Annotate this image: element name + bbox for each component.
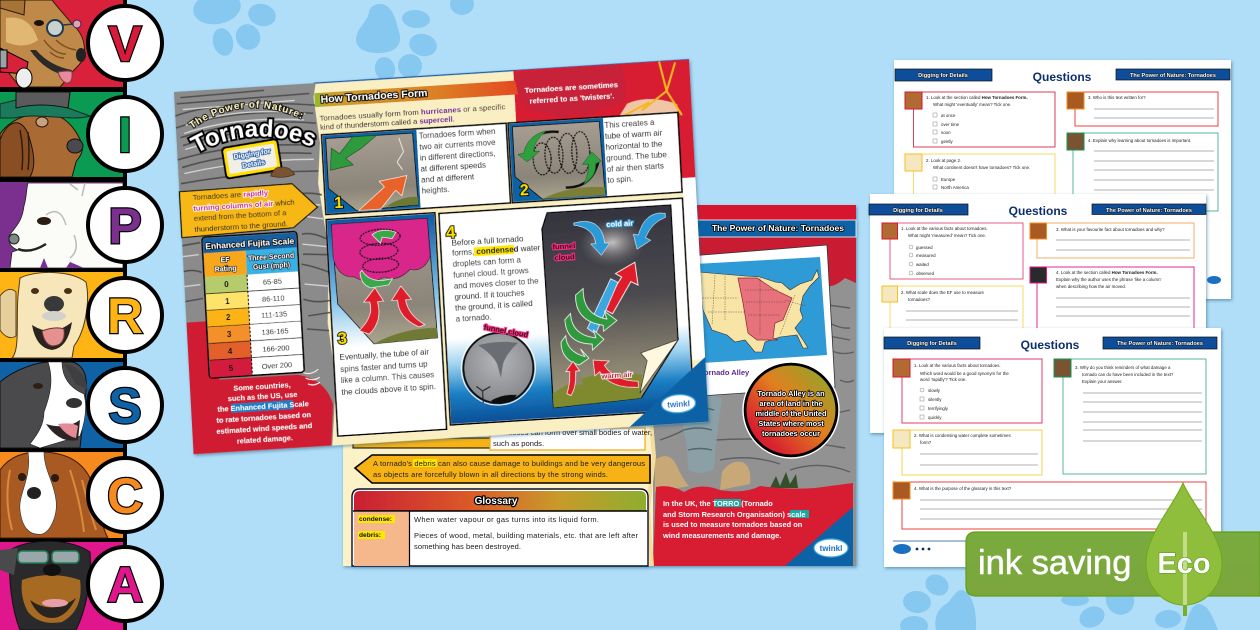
arrow: green current: [329, 135, 378, 170]
callout circle: Tornado Alley: Tornado Alley is an: [757, 389, 825, 398]
panel 2 text: horizontal to the: [605, 139, 663, 152]
question 1: Which word would be a good synonym for the: [920, 371, 1009, 376]
question 4: 4. Explain why learning about tornadoes is important.: [1088, 138, 1191, 143]
question 3: [1030, 223, 1194, 258]
air tube coils: [532, 131, 591, 176]
photo: funnel cloud inset: [459, 320, 537, 407]
heading bar: How Tornadoes Form: How Tornadoes Form: [320, 88, 428, 106]
map of the USA: [698, 270, 819, 352]
panel 3: column of air: [326, 213, 447, 436]
question 1: slowly: [928, 388, 941, 393]
photo: tornado with airflow arrows: cloud: [554, 252, 575, 262]
red footer panel: TORRO scale: wind measurements and damage.: [662, 531, 781, 540]
fact box: such as ponds: Tornadoes can form over small bodies of water,: [493, 428, 652, 437]
title: The Power of Nature: Tornadoes: [186, 99, 318, 154]
table rows: 136-165: [261, 326, 289, 337]
table rows: [205, 271, 303, 378]
yellow arrow: definition: Tornadoes are rapidly: [192, 188, 269, 202]
arrow: green right: [582, 151, 603, 184]
callout circle: Tornado Alley: middle of the United: [755, 409, 827, 418]
intro text: [319, 102, 506, 132]
question 1: terrifyingly: [928, 406, 949, 411]
number 1: 1: [334, 195, 344, 212]
panel 3 text: like a column. This causes: [341, 370, 434, 385]
panel 4 text: funnel cloud. It grows: [453, 266, 529, 280]
question 1: What might 'eventually' mean? Tick one.: [933, 102, 1011, 107]
red callout blob: to rate tornadoes based on: [216, 410, 312, 425]
question 4: [1067, 133, 1218, 211]
heading: Questions: Questions: [1033, 70, 1092, 84]
text: Eco: Eco: [1157, 548, 1211, 580]
arrow: red up left: [357, 287, 385, 335]
icon: border collie: [0, 362, 88, 448]
heading: Questions: Questions: [1009, 204, 1068, 218]
header bar right: The Power of Nature: Tornadoes: [1106, 208, 1192, 214]
question 4: [1030, 267, 1194, 337]
header bar right: [1116, 69, 1230, 80]
question 3: tornado can do have been included in the text?: [1082, 372, 1174, 377]
panel 1: two air currents: [322, 123, 510, 215]
letter badge A: [88, 547, 162, 621]
heading bar: How Tornadoes Form: [314, 80, 520, 107]
question 4: 4. What is the purpose of the glossary in this text?: [914, 486, 1012, 491]
panel 2 text: ground. The tube: [606, 150, 668, 163]
arrow: orange current: [357, 175, 409, 211]
callout circle: Tornado Alley: area of land in the: [759, 399, 823, 408]
question 2: North America: [941, 185, 969, 190]
table rows: 2: [226, 313, 231, 322]
panel 4 text: forms, condensed water: [452, 243, 541, 258]
question 1: 1. Look at the various facts about tornadoes.: [914, 363, 1001, 368]
header bar left: [869, 204, 968, 215]
logo: twinkl: twinkl: [820, 544, 842, 553]
worksheet C: [884, 328, 1221, 567]
text: ink saving: ink saving: [978, 544, 1131, 582]
photo: Tornado Alley map: [690, 245, 835, 396]
header bar right: The Power of Nature: Tornadoes: [1117, 341, 1203, 347]
glossary: Glossary: [475, 496, 518, 507]
header bar left: Digging for Details: [893, 208, 943, 214]
icon: pile of dirt: [270, 166, 295, 178]
question 1: soon: [941, 130, 951, 135]
panel 2 text: of air then starts: [607, 161, 664, 174]
table rows: 166-200: [262, 343, 290, 354]
letter badge C: [88, 458, 162, 532]
red footer panel: TORRO scale: [653, 483, 853, 566]
red footer panel: TORRO scale: and Storm Research Organisation) scale: [663, 510, 806, 519]
arrow: red up right: [391, 285, 425, 329]
arrow box: debris fact: A tornado's debris can also cause damage to buildings and be very dangerous: [373, 459, 645, 468]
icon: cavalier spaniel: [0, 452, 108, 538]
red lightning corner: [513, 60, 695, 188]
ink saving eco banner: [966, 483, 1260, 616]
logo: twinkl small with dots: [893, 541, 1000, 554]
panel 1 text: in different directions,: [420, 149, 496, 163]
yellow arrow: definition: extend from the bottom of a: [194, 208, 287, 223]
question 1: word 'rapidly'? Tick one.: [920, 377, 967, 382]
number 4: 4: [445, 222, 456, 242]
number 2: 2: [519, 182, 529, 199]
title bar: The Power of Nature: Tornadoes: The Power of Nature: Tornadoes: [712, 223, 844, 233]
table rows: 3: [227, 330, 232, 339]
left VIPERS strip: [0, 0, 162, 630]
icon: rottweiler with glasses: [0, 541, 90, 630]
question 1: quickly: [928, 415, 942, 420]
question 1: 1. Look at the section called How Tornadoes Form.: [926, 95, 1028, 100]
top red band: [697, 205, 856, 221]
table: Enhanced Fujita Scale: Rating: [215, 265, 237, 274]
cream page base: [174, 60, 709, 454]
question 2: [882, 286, 1023, 341]
question 3: [1067, 92, 1218, 126]
question 4: Explain why the author uses the phrase 'like a column': [1056, 277, 1162, 282]
red footer panel: TORRO scale: In the UK, the TORRO (Tornado: [663, 499, 773, 508]
red callout blob: [186, 314, 335, 454]
panel 1 text: two air currents move: [419, 138, 496, 152]
question 2: [905, 154, 1055, 199]
question 2: form?: [920, 440, 932, 445]
panel 1 text: at different speeds: [420, 161, 486, 174]
gray storm area: [653, 205, 856, 566]
badge: Digging for Details: [220, 137, 295, 181]
main tornado reading sheet: [173, 58, 712, 458]
title: The Power of Nature: Tornadoes: The Power of Nature:: [186, 99, 304, 129]
header bar left: Digging for Details: [907, 341, 957, 347]
table rows: 4: [228, 347, 233, 356]
arrow: blue rising: [585, 278, 621, 334]
question 2: 2. What scale does the EF use to measure: [901, 290, 985, 295]
panel 2 text: tube of warm air: [605, 128, 663, 141]
question 3: 3. What is your favourite fact about tornadoes and why?: [1056, 227, 1165, 232]
table rows: Over 200: [262, 360, 292, 371]
red footer panel: TORRO scale: is used to measure tornadoes based on: [663, 520, 803, 529]
torn cream edge: [648, 205, 654, 566]
intro text: kind of thunderstorm called a supercell.: [320, 114, 455, 132]
panel 3 text: the clouds above it to spin.: [341, 382, 436, 397]
arrow: cold air right: [632, 213, 667, 249]
page 2 of reading sheet, behind main sheet: [343, 205, 856, 566]
panel 2 text: to spin.: [607, 174, 633, 185]
panel 4 text: Before a full tornado: [451, 234, 524, 248]
callout circle: Tornado Alley: States where most: [758, 419, 824, 428]
logo: twinkl: [814, 539, 848, 557]
question 1: [893, 359, 1042, 423]
panel 2 text: This creates a: [604, 118, 655, 130]
letter badge A: A: [107, 557, 143, 613]
strip backing and colour bands: [0, 0, 127, 630]
panel 2 text: [604, 117, 669, 185]
table rows: 1: [225, 297, 230, 306]
question 4: when describing how the air moved.: [1056, 284, 1126, 289]
photo: tornado with airflow arrows: cold air: [606, 218, 633, 229]
arrows: green swirl bands: [558, 287, 619, 366]
table rows: 111-135: [261, 309, 287, 320]
panel 4 text: [451, 233, 544, 324]
icon: white fluffy dog: [9, 183, 123, 268]
yellow arrow: definition: [179, 182, 319, 238]
panel 2: tube of warm air: [508, 112, 682, 203]
panel 4 text: droplets can form a: [452, 255, 522, 269]
blue corner with twinkl logo: twinkl: [667, 399, 690, 409]
red callout blob: related damage.: [237, 433, 293, 446]
letter badge P: P: [108, 198, 142, 254]
glossary: [352, 489, 648, 566]
header bar right: [1092, 204, 1206, 214]
badge: Digging for Details: Digging for: [233, 148, 271, 161]
letter badge R: R: [107, 288, 143, 344]
icon: bloodhound with hat: [0, 92, 90, 177]
panel 1 text: heights.: [421, 185, 450, 196]
gray tornado side panel: [174, 83, 339, 454]
question 4: [893, 482, 1206, 529]
panel 3 text: [339, 347, 436, 397]
number 3: 3: [337, 328, 348, 348]
worksheet B: [869, 194, 1206, 433]
arrow: green swirl top: [372, 229, 396, 244]
spiral coils: [359, 228, 402, 273]
question 2: Europe: [941, 177, 956, 182]
table rows: 65-85: [263, 276, 282, 287]
intro text: Tornadoes usually form from hurricanes or a specific: [319, 102, 506, 123]
title: The Power of Nature: Tornadoes: Tornadoes: [186, 117, 318, 154]
question 1: over time: [941, 122, 960, 127]
labels: funnel: [552, 241, 575, 251]
panel 3 text: spins faster and turns up: [340, 359, 428, 374]
red callout blob: Some countries,: [233, 380, 291, 393]
question 1: measured: [916, 253, 936, 258]
question 3: Explain your answer.: [1082, 379, 1123, 384]
question 2: What continent doesn't have tornadoes? Tick one.: [933, 165, 1030, 170]
letter badge I: I: [118, 107, 132, 163]
glossary: debris:: [359, 532, 381, 539]
panel 4 text: and moves closer to the: [454, 276, 539, 291]
icon: leaf: [1146, 483, 1222, 616]
blue corner with twinkl logo: [626, 357, 709, 427]
panel 4 text: the ground, it is called: [455, 299, 533, 313]
question 2: 2. Look at page 2.: [926, 158, 961, 163]
photo: tornado with airflow arrows: [541, 205, 681, 408]
panel 4: funnel cloud and tornado: [439, 198, 694, 425]
panel 1 text: and at different: [421, 172, 475, 185]
glossary: When water vapour or gas turns into its liquid form.: [414, 515, 599, 524]
arrow: warm air: [593, 357, 639, 390]
yellow arrow: definition: turning columns of air which: [193, 198, 295, 213]
glossary: Pieces of wood, metal, building materials, etc. that are left after: [414, 531, 638, 540]
callout circle: Tornado Alley: tornadoes occur: [762, 429, 820, 438]
letter badge S: [88, 368, 162, 442]
question 2: [893, 430, 1042, 475]
glossary: something has been destroyed.: [414, 542, 521, 551]
fact box: such as ponds: [353, 428, 652, 450]
arrow: cold air left: [574, 220, 610, 257]
photo: tornado with airflow arrows: warm air: [600, 370, 633, 381]
question 2: 2. What is condensing water complete sometimes: [914, 433, 1011, 438]
banner: [966, 532, 1260, 596]
letter badge I: [88, 97, 162, 171]
table: Enhanced Fujita Scale: EF: [221, 257, 231, 264]
question 1: [882, 223, 1023, 279]
letter badge V: [88, 6, 162, 80]
arrow: green swirl bottom: [360, 269, 393, 289]
table rows: 86-110: [262, 293, 285, 304]
arrow box: debris fact: [355, 455, 650, 483]
title bar: The Power of Nature: Tornadoes: [697, 220, 856, 237]
panel 1 text: Tornadoes form when: [418, 127, 496, 141]
cloud callout: twisters: referred to as 'twisters'.: [529, 91, 615, 106]
header bar left: [884, 337, 980, 349]
header bar left: Digging for Details: [918, 73, 968, 79]
badge: Digging for Details: Details: [242, 159, 266, 170]
red callout blob: such as the US, use: [228, 390, 298, 403]
question 1: waited: [916, 262, 929, 267]
icon: golden retriever: [0, 272, 88, 358]
question 3: 3. Why do you think reminders of what damage a: [1075, 365, 1171, 370]
panel 4 text: ground. If it touches: [454, 288, 525, 302]
question 1: guessed: [916, 245, 933, 250]
yellow arrow: definition: thunderstorm to the ground.: [194, 219, 288, 234]
table: Enhanced Fujita Scale: Enhanced Fujita Scale: [205, 236, 295, 251]
fact box: such as ponds: such as ponds.: [493, 439, 544, 448]
red callout blob: estimated wind speeds and: [216, 421, 313, 436]
panel 3 text: Eventually, the tube of air: [339, 347, 430, 362]
photo: funnel cloud inset: funnel cloud: [483, 323, 529, 340]
panel 1 text: [418, 127, 499, 196]
panel 4 text: a tornado.: [455, 312, 492, 324]
question 1: at once: [941, 113, 956, 118]
question 1: gently: [941, 139, 954, 144]
red callout blob: the Enhanced Fujita Scale: [217, 399, 309, 414]
letter badge P: [88, 188, 162, 262]
table: Enhanced Fujita Scale: Gust (mph): [253, 262, 290, 271]
question 1: observed: [916, 271, 935, 276]
table rows: 5: [229, 364, 234, 373]
table: Enhanced Fujita Scale: [202, 231, 304, 378]
page curl: [637, 340, 681, 393]
logo: twinkl small: [1207, 276, 1221, 284]
question 1: [905, 92, 1055, 147]
callout circle: Tornado Alley: [743, 362, 839, 458]
header bar left: [895, 69, 992, 81]
cloud callout: twisters: [513, 64, 627, 120]
table: Enhanced Fujita Scale: Three Second: [248, 253, 294, 263]
question 1: What might 'measured' mean? Tick one.: [908, 233, 986, 238]
arrow: green left: [517, 131, 548, 162]
arrow: red rising: [600, 262, 640, 314]
question 3: [1054, 359, 1206, 474]
question 1: silently: [928, 397, 942, 402]
question 1: 1. Look at the various facts about tornadoes.: [901, 226, 988, 231]
letter badge S: S: [108, 378, 142, 434]
heading: Questions: Questions: [1021, 338, 1080, 352]
question 2: tornadoes?: [908, 297, 931, 302]
header bar right: [1103, 337, 1217, 349]
icon: airedale dog with glasses: [0, 0, 86, 88]
table rows: 0: [224, 280, 229, 289]
glossary: condense:: [359, 516, 392, 523]
arrow box: debris fact: as objects are forcefully blown in all directions by the strong winds.: [373, 470, 608, 479]
caption: Tornado Alley: Tornado Alley: [700, 368, 750, 377]
letter badge V: V: [108, 16, 142, 72]
cloud callout: twisters: Tornadoes are sometimes: [524, 80, 618, 95]
question 4: 4. Look at the section called How Tornadoes Form.: [1056, 270, 1158, 275]
question 3: 3. Who is this text written for?: [1088, 95, 1146, 100]
white right margin: [682, 177, 705, 360]
letter badge R: [88, 278, 162, 352]
header bar right: The Power of Nature: Tornadoes: [1130, 73, 1216, 79]
letter badge C: C: [107, 468, 143, 524]
worksheet A: [894, 60, 1231, 299]
pink cloud: [331, 218, 431, 284]
